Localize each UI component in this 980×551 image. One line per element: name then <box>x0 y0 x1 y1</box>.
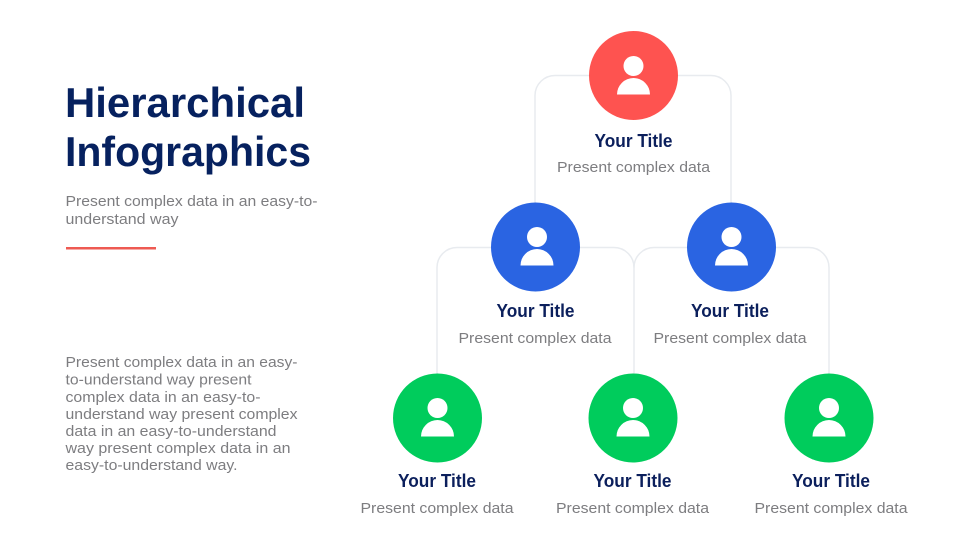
node: middle right blue: Present complex data <box>654 330 807 347</box>
connector lines <box>437 76 829 376</box>
body paragraph: to-understand way present <box>66 372 252 388</box>
body paragraph: complex data in an easy-to- <box>66 389 261 406</box>
node: top red: Your Title <box>594 131 672 151</box>
node: bottom left green <box>360 374 514 517</box>
node: bottom middle green: Present complex data <box>556 500 710 517</box>
body paragraph: data in an easy-to-understand <box>66 423 276 440</box>
body paragraph: way present complex data in an <box>64 440 290 457</box>
body paragraph: easy-to-understand way. <box>66 457 238 474</box>
title: Hierarchical <box>65 79 305 126</box>
title: Infographics <box>65 128 311 175</box>
body paragraph <box>64 354 298 474</box>
node: middle left blue <box>458 202 612 347</box>
node: bottom middle green <box>556 374 710 517</box>
subtitle text <box>66 193 318 228</box>
node: bottom middle green: Your Title <box>594 471 672 491</box>
body paragraph: understand way present complex <box>66 406 298 423</box>
subtitle text: understand way <box>66 211 179 228</box>
subtitle text: Present complex data in an easy-to- <box>66 193 318 210</box>
node: top red: Present complex data <box>557 159 711 176</box>
node: bottom right green <box>754 374 908 517</box>
node: bottom left green: Present complex data <box>360 500 514 517</box>
accent divider <box>66 247 156 250</box>
node: bottom right green: Present complex data <box>754 500 908 517</box>
node: middle left blue: Present complex data <box>458 330 612 347</box>
node: bottom right green: Your Title <box>792 471 870 491</box>
node: bottom left green: Your Title <box>398 471 476 491</box>
node: middle right blue: Your Title <box>691 301 769 321</box>
node: middle left blue: Your Title <box>496 301 574 321</box>
node: middle right blue <box>654 202 807 347</box>
title <box>65 79 311 175</box>
body paragraph: Present complex data in an easy- <box>66 354 298 371</box>
node: top red <box>557 31 711 176</box>
